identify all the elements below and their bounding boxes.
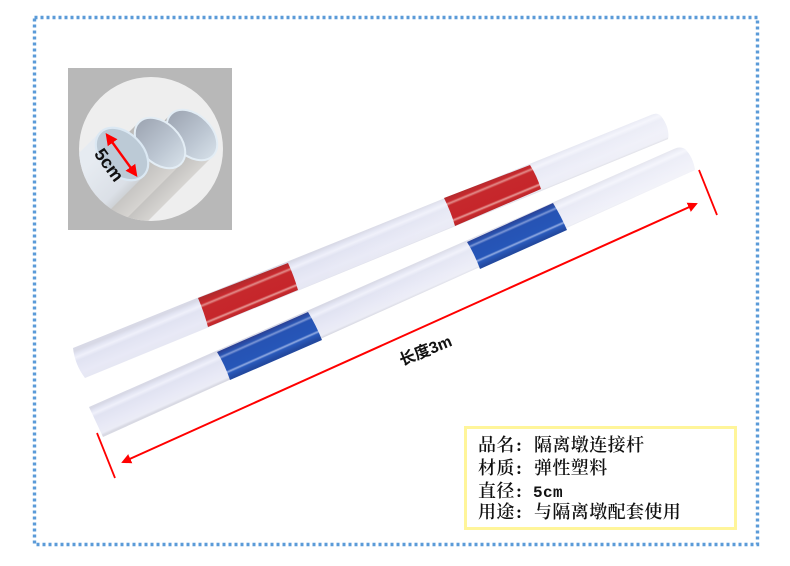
- red and white pole: [73, 114, 668, 378]
- diameter: 直径: [478, 481, 515, 501]
- blue and white pole: [89, 148, 695, 437]
- material: :: [516, 458, 522, 478]
- red band left: [198, 263, 298, 327]
- blue band right: [467, 203, 567, 269]
- double arrow: diameter: [107, 135, 136, 175]
- inset photo: pipe diameter: [68, 68, 232, 230]
- material: 弹性塑料: [534, 458, 608, 478]
- red band right: [444, 165, 541, 226]
- length label: 长度3m: [396, 331, 455, 370]
- diameter: 5cm: [533, 484, 563, 502]
- info box: [466, 428, 736, 528]
- product name: 隔离墩连接杆: [534, 435, 644, 455]
- use: :: [516, 502, 522, 522]
- diameter: :: [516, 481, 522, 501]
- material: 材质: [478, 458, 515, 478]
- product name: 品名: [478, 435, 515, 455]
- use: 用途: [478, 502, 515, 522]
- label: 5cm: 5cm: [90, 145, 128, 185]
- blue band left: [217, 312, 322, 380]
- product name: :: [516, 435, 522, 455]
- length arrow: [97, 170, 717, 478]
- use: 与隔离墩配套使用: [534, 502, 681, 522]
